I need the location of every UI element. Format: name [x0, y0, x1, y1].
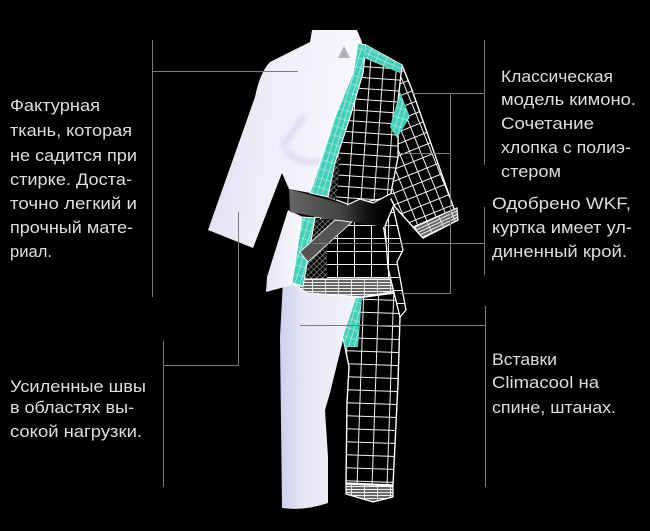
side flap	[385, 207, 406, 317]
teal lower band	[292, 217, 315, 287]
lower hatched panel	[303, 219, 334, 280]
text: fabric: Фактурная	[10, 96, 100, 115]
text: seams: Усиленные швы	[10, 377, 146, 396]
text: classic model: стером	[501, 162, 561, 181]
trouser cuff	[346, 484, 393, 502]
teal chest insert	[390, 92, 410, 138]
text: seams: сокой нагрузки.	[10, 422, 142, 441]
text: seams	[10, 377, 146, 441]
sleeve cuff	[413, 208, 458, 238]
text: fabric: ткань, которая	[10, 121, 132, 140]
text: WKF approved	[492, 194, 632, 261]
fabric folds	[282, 115, 320, 162]
text: fabric: не садится при	[10, 146, 137, 165]
teal trouser insert	[343, 298, 362, 347]
text: WKF approved: диненный крой.	[492, 242, 627, 261]
teal lapel band	[310, 43, 366, 197]
hatched panel	[328, 155, 341, 200]
text: classic model: Сочетание	[501, 114, 594, 133]
text: classic model: модель кимоно.	[501, 90, 636, 109]
text: Climacool inserts: Climacool на	[492, 373, 600, 392]
karate gi figure	[208, 30, 458, 509]
text: fabric: точно легкий и	[10, 194, 137, 213]
jacket hem	[292, 279, 397, 297]
wireframe jacket sleeve	[390, 65, 458, 238]
white trousers	[280, 280, 357, 509]
belt tail	[300, 220, 352, 262]
logo marks	[338, 46, 350, 58]
text: WKF approved: Одобрено WKF,	[492, 194, 631, 213]
text: fabric: стирке. Доста-	[10, 170, 132, 189]
white jacket	[208, 30, 362, 292]
text: fabric	[10, 96, 137, 261]
belt	[289, 189, 392, 262]
lower torso grid	[303, 217, 392, 287]
wireframe trousers	[343, 293, 400, 502]
text: Climacool inserts: спине, штанах.	[492, 398, 616, 417]
text: seams: в областях вы-	[10, 398, 134, 417]
text: classic model: хлопка с полиэ-	[501, 138, 631, 157]
text: WKF approved: куртка имеет ул-	[492, 218, 632, 237]
callout leader lines	[152, 40, 486, 487]
wireframe jacket torso	[292, 45, 406, 317]
teal collar	[364, 45, 402, 73]
text: Climacool inserts	[492, 350, 616, 417]
text: classic model: Классическая	[501, 67, 613, 86]
text: fabric: риал.	[10, 242, 52, 261]
text: fabric: прочный мате-	[10, 218, 133, 237]
text: Climacool inserts: Вставки	[492, 350, 557, 369]
text: classic model	[501, 67, 636, 181]
